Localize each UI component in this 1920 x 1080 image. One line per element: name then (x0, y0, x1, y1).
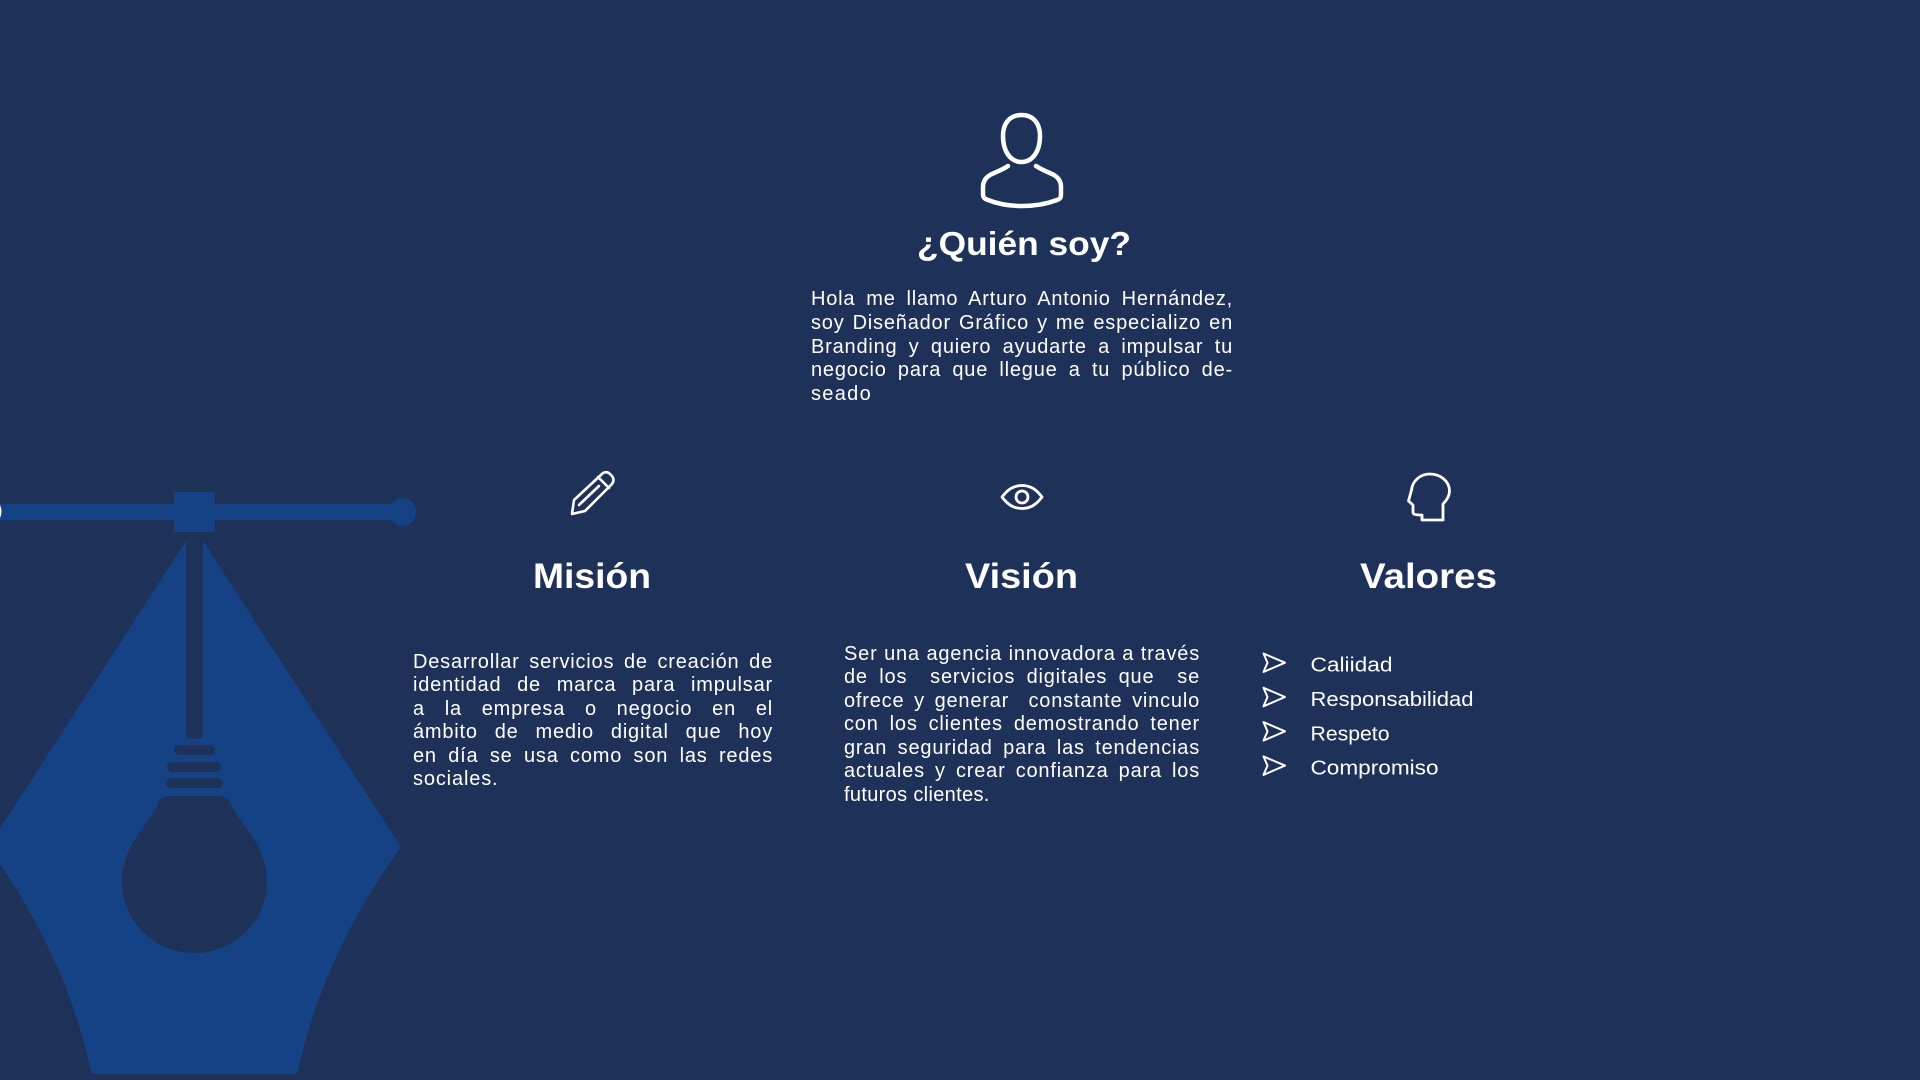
text: misión: ámbito de medio digital que hoy (413, 721, 773, 743)
list item: Responsabilidad (1264, 688, 1474, 711)
list item: Respeto: Respeto (1310, 724, 1390, 746)
icon: head (1407, 472, 1451, 522)
heading: Valores: Valores (1360, 557, 1497, 596)
text: presentación: Branding y quiero ayudarte a impulsar tu (811, 336, 1233, 358)
pen crossbar (0, 492, 416, 532)
heading: Misión: Misión (533, 557, 651, 596)
text: misión: Desarrollar servicios de creación de (413, 650, 773, 672)
text: visión: de los servicios digitales que se (844, 666, 1200, 688)
list: valores (1262, 652, 1474, 780)
logo: fountain pen nib with light bulb (0, 492, 416, 1074)
text: presentación: Hola me llamo Arturo Antonio Hernández, (811, 288, 1233, 310)
text: visión: Ser una agencia innovadora a través (844, 642, 1200, 664)
list item: Responsabilidad: Responsabilidad (1310, 689, 1474, 711)
text: misión: identidad de marca para impulsar (413, 674, 773, 696)
text: visión: futuros clientes. (844, 784, 990, 806)
text: misión: a la empresa o negocio en el (413, 698, 773, 720)
list item: Compromiso: Compromiso (1310, 758, 1438, 780)
text: presentación: soy Diseñador Gráfico y me especializo en (811, 312, 1233, 334)
text: presentación: negocio para que llegue a tu público de- (811, 359, 1233, 381)
text: visión: gran seguridad para las tendencias (844, 736, 1200, 758)
heading: Visión: Visión (965, 557, 1078, 596)
icon: eye (1000, 484, 1044, 510)
text: visión: con los clientes demostrando tener (844, 713, 1200, 735)
text: misión: sociales. (413, 768, 498, 790)
panel: quién soy (811, 112, 1233, 405)
heading: ¿Quién soy?: ¿Quién soy? (917, 225, 1131, 262)
list item: Respeto (1264, 722, 1390, 746)
icon: person (980, 112, 1064, 208)
panel: visión (844, 484, 1200, 806)
text: visión: actuales y crear confianza para los (844, 760, 1200, 782)
text: visión: ofrece y generar constante vinculo (844, 690, 1200, 712)
icon: pencil (570, 470, 615, 516)
panel: misión (413, 470, 773, 790)
panel: valores (1262, 472, 1497, 780)
text: presentación: seado (811, 383, 872, 405)
list item: Caliidad (1264, 654, 1392, 676)
text: visión (844, 642, 1200, 806)
pen nib silhouette (0, 541, 401, 1074)
light bulb (122, 745, 267, 953)
list item: Compromiso (1264, 756, 1438, 780)
text: misión (413, 650, 773, 790)
text: misión: en día se usa como son las redes (413, 744, 773, 766)
list item: Caliidad: Caliidad (1310, 654, 1392, 676)
text: presentación (811, 288, 1233, 405)
